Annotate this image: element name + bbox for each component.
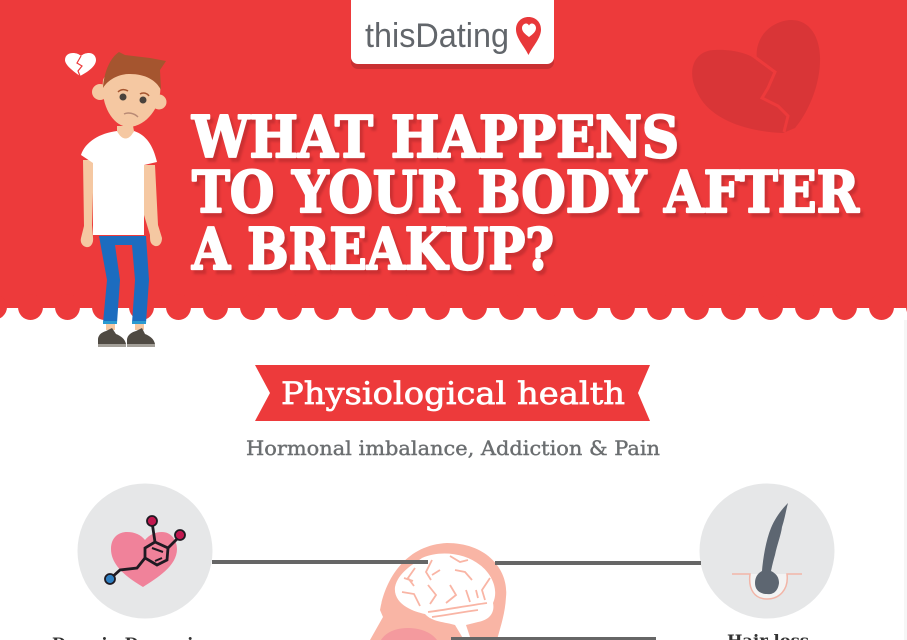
head silhouette (370, 543, 506, 640)
icon: large faded broken heart (692, 20, 820, 133)
logo: thisDating: thisDating (365, 17, 509, 55)
icon: hair follicle (700, 484, 834, 618)
icon: dopamine molecule on heart (78, 484, 212, 618)
throat (381, 628, 437, 640)
character head (103, 69, 160, 127)
character neck (117, 126, 134, 138)
connector lines (212, 560, 701, 640)
character hair (103, 52, 166, 90)
banner: Physiological health (255, 365, 650, 421)
logo: thisDating (351, 0, 554, 69)
brain and head illustration (370, 543, 506, 640)
character ears (92, 84, 108, 100)
character: sad boy (81, 52, 166, 347)
character face (118, 90, 149, 117)
banner: Physiological health: Physiological health (281, 376, 625, 412)
title (191, 104, 860, 283)
character ankles (106, 323, 144, 330)
character shirt (81, 131, 157, 235)
character jeans (99, 236, 149, 323)
icon: small white broken heart (65, 53, 96, 76)
panel: red header with scalloped edge (0, 0, 907, 320)
title: A BREAKUP? (191, 216, 554, 283)
character arms (81, 160, 162, 247)
brain (395, 554, 495, 640)
character shoes (98, 328, 155, 344)
title: WHAT HAPPENS (191, 104, 679, 171)
brain folds (402, 556, 490, 617)
subtitle: Hormonal imbalance, Addiction & Pain (246, 436, 660, 460)
